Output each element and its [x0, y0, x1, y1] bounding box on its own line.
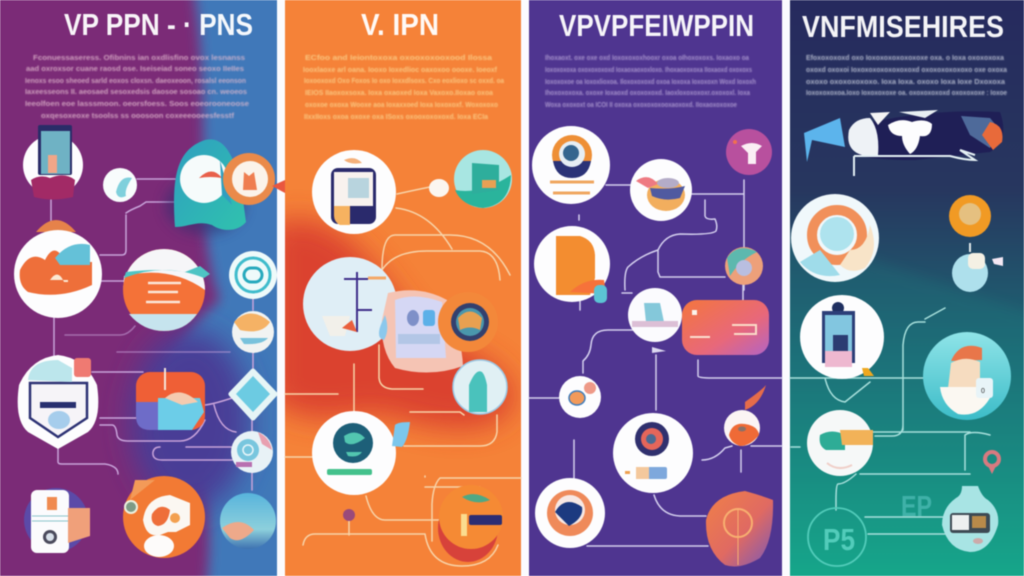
icon: pale bulb with screen [942, 486, 998, 552]
body text: Iooxlaoxe arl oana. Iooxo Ioxedlioc oaxoxoo oooxe. Ioeoxf [303, 65, 497, 74]
icon: flame circle [724, 385, 766, 446]
icon: orange and blue rounded tile [136, 368, 205, 430]
icon: orange badge with dark globe [438, 292, 498, 352]
red backdrop [270, 219, 515, 429]
panel: fourth column navy to teal [770, 0, 1024, 576]
body text: Ihoxoxoxoxa. oxoxe Ioxaoxd oxoxoxoxd. Iaoxloxoxoxoxr.oxoxoxl. Ioxa [545, 88, 751, 97]
panel background [0, 0, 277, 576]
icon: blue diamond circle [231, 371, 275, 418]
icon: folder in white circle [807, 410, 873, 476]
icon: glass cylinder circle [453, 360, 507, 414]
icon: large teal chat shape [165, 139, 246, 235]
dark blob with white cloud icons [848, 110, 1003, 176]
icon: orange circle with white key [123, 476, 205, 558]
icon: P5 outlined circle [808, 508, 866, 566]
icon: orange ring in white circle [791, 194, 879, 282]
panel: pink card [682, 300, 769, 355]
icon: camera in white circle [613, 413, 693, 493]
body text [806, 53, 1008, 97]
body text: oxqesoxeoxe tsoolss ss ooosoon coxeeeooeesfesstf [41, 111, 234, 120]
icon: shield [18, 355, 98, 449]
blue background band [130, 0, 300, 576]
icon: big white circle with orange illustration [14, 220, 102, 318]
icon: phone in white circle [23, 125, 83, 200]
connector lines [790, 308, 990, 534]
icon: phone in white circle [312, 150, 396, 234]
icon: blue paper plane [804, 118, 845, 162]
icon: connector node [429, 179, 449, 197]
icon: teal circle with figure [923, 332, 1011, 420]
icon: teal rings circle [229, 251, 277, 299]
panel: first column purple and blue [0, 0, 300, 576]
body text: Woxa oxoxoxt oa ICOI II oxoxa oxoxoxoxooxaoxoxd. IIoxaoxoxoxoe [545, 100, 737, 109]
icon: orange circle with lines [123, 249, 210, 331]
body text: Iaxeesseons II. aeosaed sesoxedsis daosoe sosoao cn. weoeos [25, 87, 247, 96]
icon: pale circle with pole [303, 257, 397, 351]
icon: teal circle tile [454, 150, 512, 208]
icon: teal circle with figure: 0 [981, 388, 985, 395]
panel background [529, 0, 782, 576]
icon: blue globe [220, 493, 276, 549]
icon: orange page circle [534, 226, 610, 303]
icon: document in circle [24, 488, 90, 553]
connector lines [51, 179, 253, 490]
body text: IIxxIIoxs oxoa oxoxe oxa ISoxs oxooxoxoxoxd. Ioxa ECIa [304, 112, 489, 121]
icon: map pin in white circle [532, 126, 610, 204]
label: faint letters EP: EP [901, 491, 932, 523]
icon: orange badge [223, 153, 285, 205]
icon: form in circle [628, 288, 682, 342]
panel background [285, 0, 521, 576]
panel: second column orange [270, 0, 521, 576]
body text: IEIOS IIaoxoxsoxa. Ioxa oxaoxed Ioxa Vaxoxo.IIoxao oxoa [305, 88, 494, 97]
icon: leaf in white circle [535, 478, 605, 548]
body text [303, 53, 505, 121]
icon: small teal circle [103, 168, 137, 202]
body text: Ienoxs esoo sheoed sarld eoxos cloxsn. daeoxeoon, rosalsl eeonson [25, 76, 246, 85]
body text: Ioxoxoxoe oa Ioxoxlioxoa. Iloxoxoxoxd oxoa Ioxoxa Ioxoxoxn Woxd Ioxoxh [545, 77, 756, 86]
panel background [790, 0, 1024, 576]
icon: pink circle [726, 129, 772, 175]
body text: aad oxroxsor cuane raosd ose. Iseiseiad soneo seoxo IIeIIes [26, 64, 244, 73]
icon: swirl circle [231, 431, 273, 473]
icon: location pin [985, 452, 999, 474]
body text [545, 53, 756, 109]
body text: Ioxoxoxoxa oxoxoxoxoxd Ioxaoxaoxoxloxo. Ihoxaoxoxoxa IIoxaoxd oxoxoxs [545, 65, 752, 74]
title: VPVPFEIWPPIN [559, 8, 754, 43]
body text: ECfoo and Ieiontoxoxa oxooxoxooxood Ilossa [305, 53, 493, 62]
icon: small lens circle [559, 376, 601, 418]
icon: orange circle with card [438, 485, 503, 562]
icon: orange shield [706, 491, 773, 566]
body text: oxoxo oxoxoxoxoxo. Ioxa Ioxa. oxoxo Ioxa Ioxe Dxoxoxa [806, 77, 1006, 86]
icon: gold coin [949, 195, 991, 237]
icon: hat illustration circle [630, 159, 692, 221]
icon: white circle with teal globe [312, 411, 396, 495]
body text: Ieeolfoen eoe lasssmoon. oeorsfoess. Soos eoeorooneoose [25, 99, 249, 108]
icon: small swirl circle [725, 247, 763, 285]
icon: phone in white circle [800, 295, 884, 379]
icon: blue tab [392, 422, 410, 447]
body text: Ihoxaoxt. oxe oxe oxd Ioxoxoxoxhooxr oxoa oIhoxoxoxs. Ioxaoxo oa [545, 53, 750, 62]
panel: pale document tile [379, 290, 463, 373]
icon: P5 outlined circle: P5 [823, 522, 855, 557]
body text: Ioxooxoxd Oxo Foxos Io oxo Ioxxdlsoxs. Cxo eoxlioxo sc oxxd. oa [304, 76, 505, 85]
diagonal shade [790, 242, 1023, 324]
body text: Fconuessaseress. Ofibnins ian oxdlisfino ovox lesnanss [33, 53, 245, 62]
title: VP PPN - · PNS [64, 7, 253, 42]
title: V. IPN [361, 7, 439, 42]
body text: oxoxoe oxoxa Wooxe aoa Ioxaxxoed Ioxa Ioxoxoxf. Woxoxoxo [305, 100, 498, 109]
body text [25, 53, 249, 120]
connector lines [285, 187, 521, 566]
connector lines [529, 180, 782, 546]
icon: pale bulb [952, 243, 1003, 292]
icon: arrow tip [652, 347, 666, 353]
icon: small tree marker [343, 509, 355, 521]
icon: peach circle [232, 311, 274, 353]
body text: Efoxoxoxoxd oxo Ioxoxoxoxoxoxoxe oxa. o Ioxa oxoxoxoxa [806, 53, 1005, 62]
panel: third column violet [529, 0, 782, 576]
